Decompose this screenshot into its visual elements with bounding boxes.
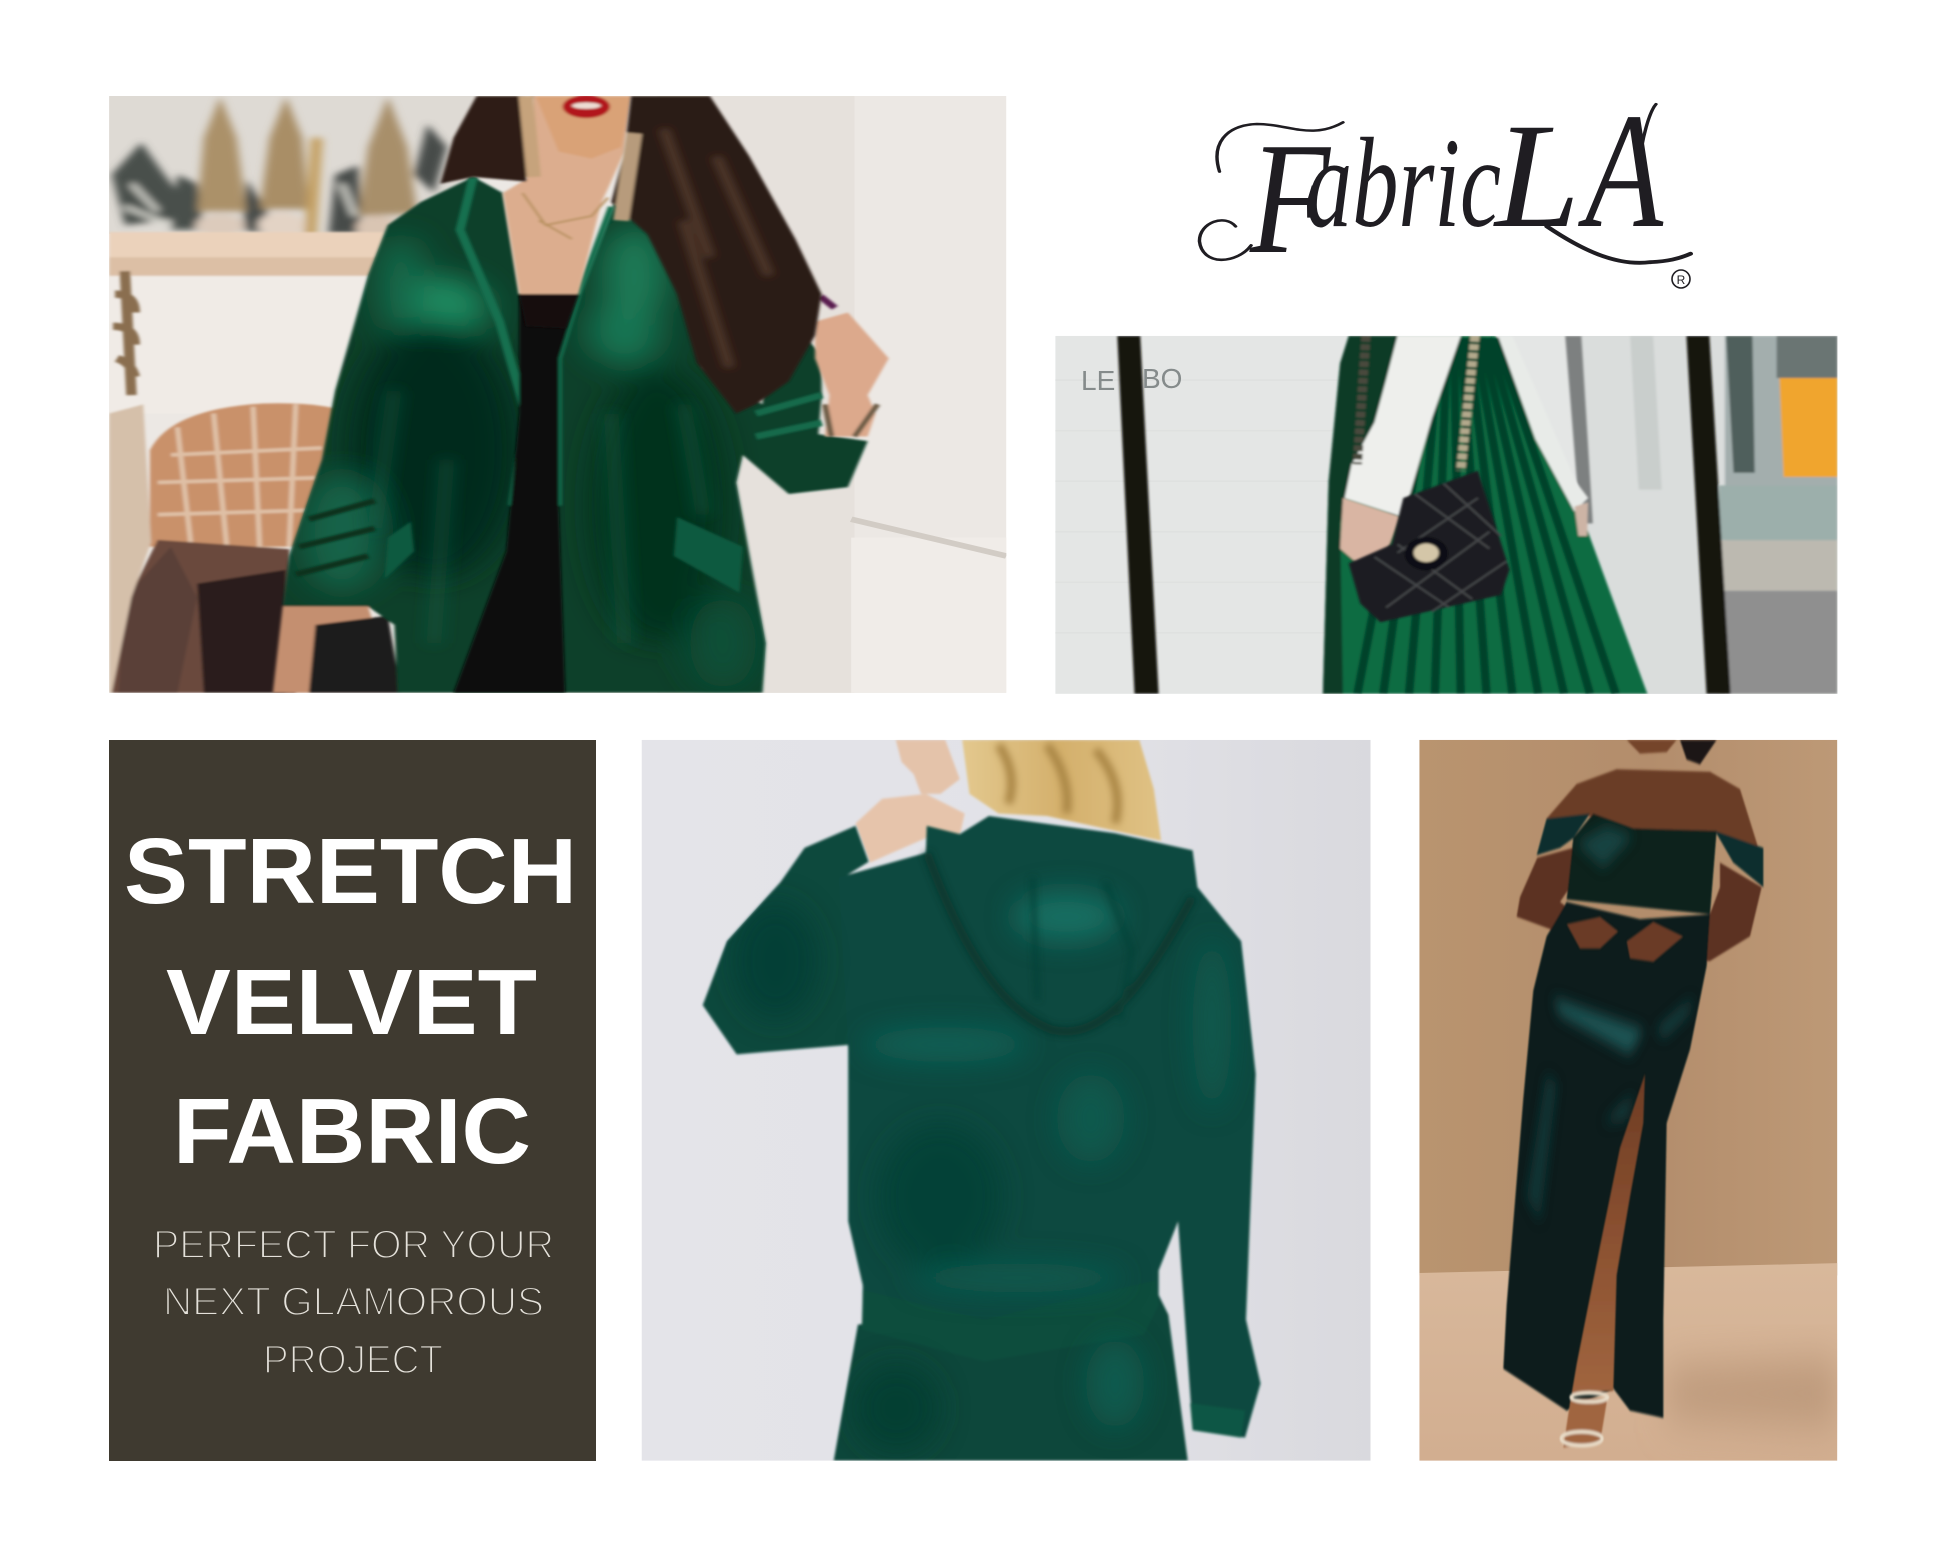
icon: mantel decorations <box>112 96 447 239</box>
logo: FabricLA <box>1199 79 1690 288</box>
sandals <box>1571 1393 1608 1402</box>
heading: Stretch Velvet Fabric <box>124 819 577 1183</box>
logo: FabricLA: F <box>1249 109 1332 287</box>
registered mark: R <box>1677 273 1686 287</box>
hood outline <box>927 853 1193 1031</box>
text block: tagline <box>153 1223 554 1382</box>
figure skin <box>1627 740 1677 754</box>
hair and skin <box>856 740 1161 863</box>
skin <box>503 95 889 437</box>
sign text: LE BO: LE <box>1081 365 1115 396</box>
text block: tagline: NEXT GLAMOROUS <box>163 1280 544 1324</box>
icon: logo swashes <box>1199 104 1690 263</box>
panel: title block <box>109 740 596 1461</box>
logo: FabricLA: abric <box>1306 112 1501 254</box>
leg through slit <box>1572 1074 1645 1393</box>
heading: Stretch Velvet Fabric: VELVET <box>166 950 537 1054</box>
text block: tagline: PROJECT <box>263 1338 443 1382</box>
sign text: LE BO: BO <box>1142 363 1182 394</box>
hoodie <box>703 816 1260 1461</box>
gown <box>1567 814 1717 914</box>
panel: photo of woman in green velvet blazer <box>109 95 1006 693</box>
panel: photo of green velvet hoodie from behind <box>642 740 1371 1461</box>
hands <box>1567 917 1618 949</box>
panel: photo of pleated green velvet skirt with handbag <box>1055 336 1837 694</box>
skirt with pleats <box>1323 336 1647 694</box>
sign text: LE BO <box>1081 363 1182 396</box>
text block: tagline: PERFECT FOR YOUR <box>153 1223 554 1267</box>
jacket <box>273 177 868 693</box>
heading: Stretch Velvet Fabric: FABRIC <box>173 1079 531 1183</box>
logo: FabricLA: L <box>1493 93 1580 259</box>
icon: quilted handbag <box>1349 471 1510 622</box>
heading: Stretch Velvet Fabric: STRETCH <box>124 819 577 923</box>
hair <box>440 96 822 414</box>
registered mark <box>1672 270 1690 288</box>
logo: FabricLA: A <box>1577 79 1664 262</box>
icon: mantel and fireplace <box>109 232 385 693</box>
panel: photo of dark green velvet gown <box>1419 740 1837 1461</box>
